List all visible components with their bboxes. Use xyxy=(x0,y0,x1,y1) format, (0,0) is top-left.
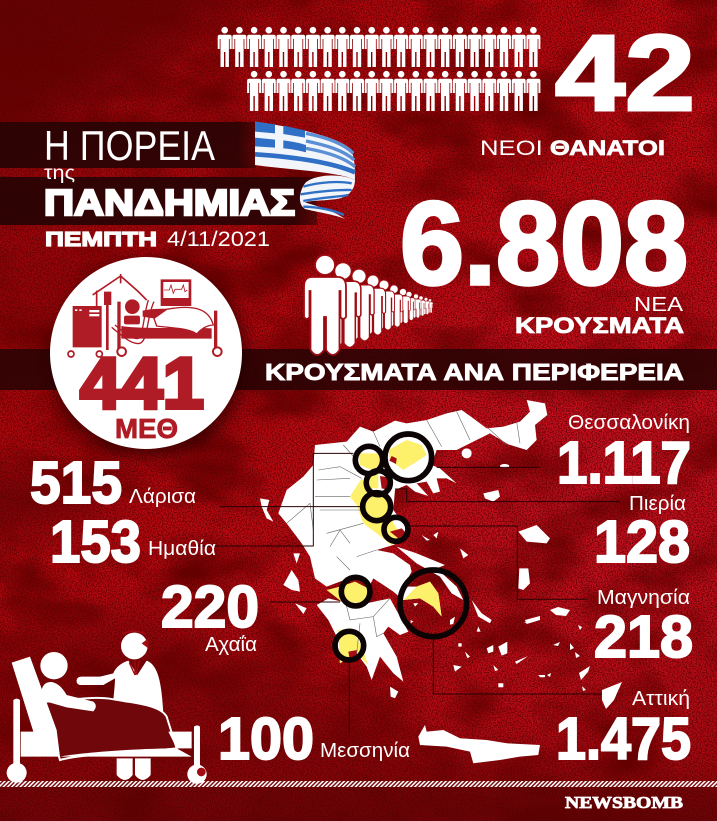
date value: 4/11/2021 xyxy=(167,228,270,251)
Achaia xyxy=(161,574,259,656)
deaths label: ΝΕΟΙ ΘΑΝΑΤΟΙ xyxy=(480,137,665,160)
Evia xyxy=(397,547,463,600)
ICU badge xyxy=(50,257,248,458)
Attica xyxy=(556,688,691,772)
icon: ICU bed and equipment xyxy=(68,274,222,357)
east islands xyxy=(524,607,622,709)
value: 220 xyxy=(161,574,259,640)
title line 1: Η ΠΟΡΕΙΑ xyxy=(44,122,215,169)
label: Μαγνησία xyxy=(597,587,690,609)
cases number: 6.808 xyxy=(400,178,688,310)
flag ribbon xyxy=(255,122,355,219)
value: 100 xyxy=(218,706,314,772)
value: 218 xyxy=(594,604,693,670)
Thessaloniki xyxy=(557,412,691,496)
value: 153 xyxy=(50,509,141,575)
Crete xyxy=(418,725,540,763)
value: 1.117 xyxy=(557,430,691,496)
logo: NEWSBOMB xyxy=(565,793,683,812)
Larisa xyxy=(30,450,196,516)
label: Αχαΐα xyxy=(205,634,257,656)
dark bands xyxy=(0,122,717,390)
icon: patient in bed with doctor xyxy=(7,631,207,784)
label: Ημαθία xyxy=(148,538,216,560)
islands xyxy=(260,448,560,698)
Magnesia xyxy=(594,587,693,670)
label: Λάρισα xyxy=(129,486,196,508)
highlighted regions xyxy=(327,440,442,665)
ICU label: ΜΕΘ xyxy=(115,413,178,444)
cases label line 2: ΚΡΟΥΣΜΑΤΑ xyxy=(515,313,684,338)
title small word: της xyxy=(44,163,75,184)
mainland xyxy=(278,400,547,617)
label: Αττική xyxy=(632,688,690,710)
region borders xyxy=(287,412,520,653)
deaths number: 42 xyxy=(555,12,695,133)
deaths pictogram: 42 people xyxy=(218,27,540,111)
value: 515 xyxy=(30,450,122,516)
ICU number: 441 xyxy=(80,344,204,424)
blanket xyxy=(42,698,177,760)
leader lines xyxy=(195,453,620,733)
value: 128 xyxy=(594,509,690,575)
patient xyxy=(7,652,207,784)
regional cases heading: ΚΡΟΥΣΜΑΤΑ ΑΝΑ ΠΕΡΙΦΕΡΕΙΑ xyxy=(265,359,684,385)
title xyxy=(44,122,295,251)
value: 1.475 xyxy=(556,706,691,772)
date: ΠΕΜΠΤΗ xyxy=(45,229,157,251)
label: Πιερία xyxy=(629,493,686,515)
title line 2: ΠΑΝΔΗΜΙΑΣ xyxy=(44,182,295,223)
Imathia xyxy=(50,509,216,575)
highlight circles xyxy=(335,434,467,660)
sea cut-outs xyxy=(348,456,407,657)
queue of people icon xyxy=(304,255,433,355)
label: Μεσσηνία xyxy=(320,740,410,762)
label: Θεσσαλονίκη xyxy=(568,412,690,434)
Pieria xyxy=(594,493,690,575)
Peloponnese xyxy=(317,598,408,682)
cases label line 1: ΝΕΑ xyxy=(634,294,684,316)
hatched footer line xyxy=(0,781,717,787)
Messinia xyxy=(218,706,410,772)
map of Greece xyxy=(195,400,620,763)
doctor xyxy=(77,633,163,780)
